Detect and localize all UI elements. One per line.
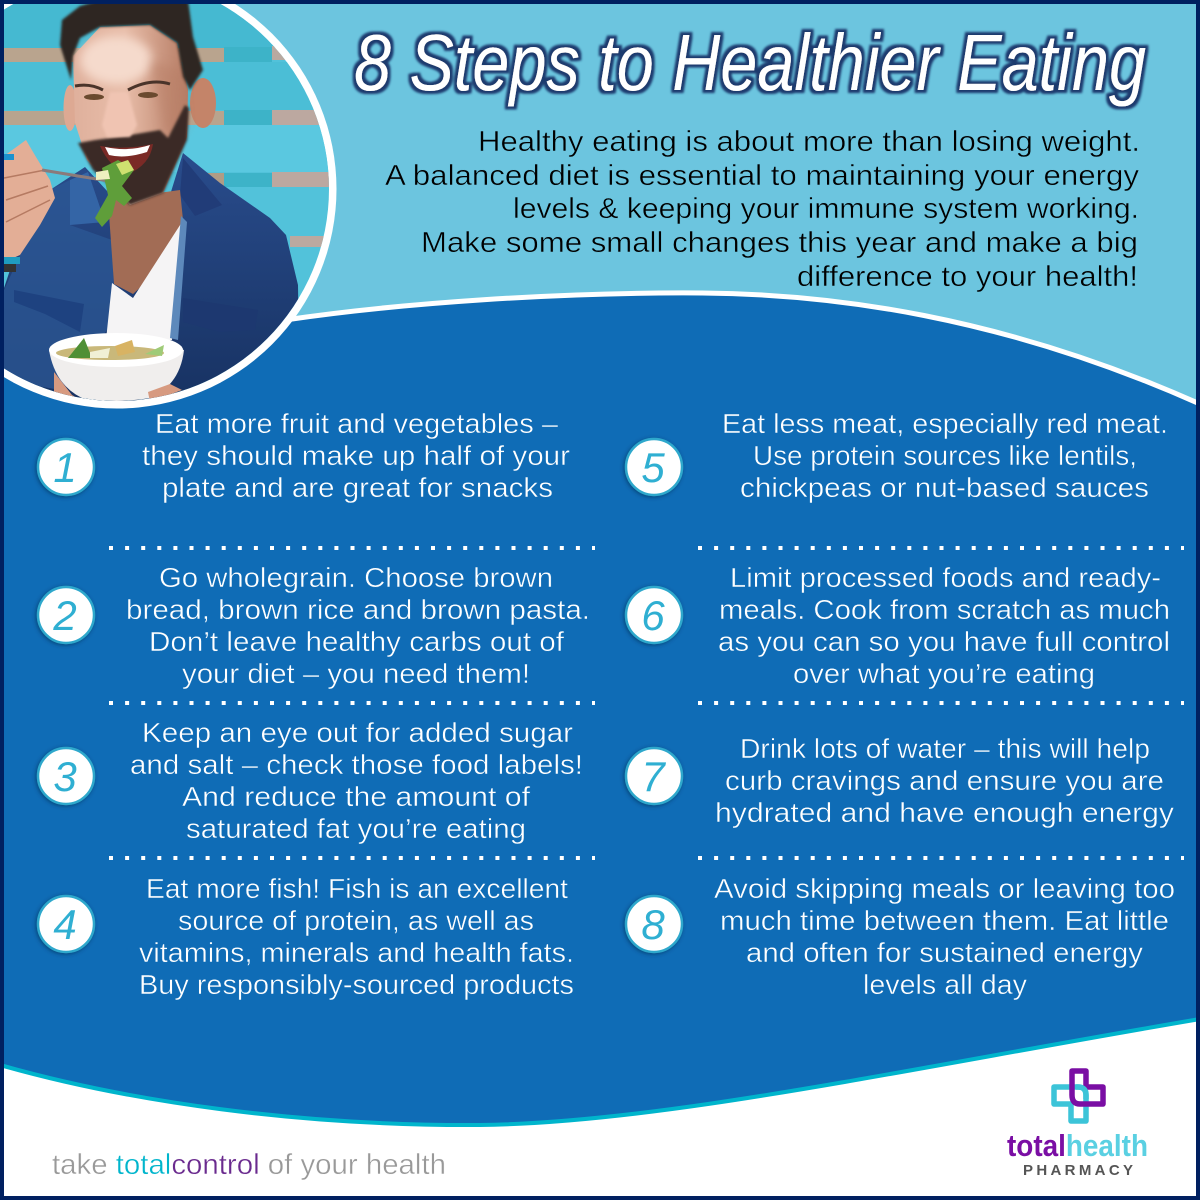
step 1 text: plate and are great for snacks bbox=[162, 472, 553, 503]
step 3 text: Keep an eye out for added sugar bbox=[142, 717, 573, 748]
face bbox=[73, 25, 188, 205]
step 8 bbox=[626, 873, 1175, 1000]
intro text bbox=[385, 126, 1140, 293]
step 8 text: Avoid skipping meals or leaving too bbox=[714, 873, 1175, 904]
salad on fork bbox=[95, 160, 134, 227]
step 5 text: Eat less meat, especially red meat. bbox=[722, 408, 1168, 439]
mouth bbox=[100, 144, 153, 174]
tagline: take totalcontrol of your health bbox=[52, 1149, 446, 1181]
logo subtitle: PHARMACY bbox=[1023, 1162, 1133, 1179]
right cheek shade bbox=[150, 60, 186, 135]
badge 7: 7 bbox=[641, 753, 666, 800]
badge 5 bbox=[626, 439, 682, 495]
intro text: A balanced diet is essential to maintaining your energy bbox=[385, 160, 1140, 192]
badge 4: 4 bbox=[53, 901, 77, 948]
step 7 bbox=[626, 733, 1174, 828]
photo: man eating salad in a circle bbox=[0, 0, 340, 420]
white shirt bbox=[106, 222, 182, 340]
step 4 text bbox=[139, 873, 574, 1000]
bowl bbox=[49, 350, 184, 401]
hair bbox=[60, 0, 203, 90]
jacket bbox=[0, 153, 300, 420]
bowl hands bbox=[54, 372, 76, 397]
step 4 text: Eat more fish! Fish is an excellent bbox=[146, 873, 568, 904]
badge 7 bbox=[626, 748, 682, 804]
ears bbox=[190, 78, 216, 128]
step 2 text: Don’t leave healthy carbs out of bbox=[149, 626, 564, 657]
panel: blue steps wave bbox=[0, 293, 1200, 1200]
step 8 text: and often for sustained energy bbox=[746, 937, 1143, 968]
step 8 text: levels all day bbox=[863, 969, 1027, 1000]
step 2 text: bread, brown rice and brown pasta. bbox=[126, 594, 590, 625]
logo wordmark: totalhealth bbox=[1007, 1128, 1148, 1163]
step 2 text: your diet – you need them! bbox=[182, 658, 530, 689]
step 3 text: saturated fat you’re eating bbox=[186, 813, 526, 844]
step 6 text: over what you’re eating bbox=[793, 658, 1095, 689]
badge 3 bbox=[38, 748, 94, 804]
icon: interlocked cross bbox=[1054, 1071, 1103, 1121]
badge 5: 5 bbox=[641, 444, 665, 491]
step 3 text: and salt – check those food labels! bbox=[130, 749, 583, 780]
badge 6 bbox=[626, 587, 682, 643]
nose bbox=[102, 92, 137, 137]
badge 1: 1 bbox=[53, 444, 77, 491]
dotted dividers bbox=[109, 548, 1184, 858]
badge 8 bbox=[626, 896, 682, 952]
step 2 text bbox=[126, 562, 590, 689]
intro text: Healthy eating is about more than losing weight. bbox=[478, 126, 1140, 158]
step 6 text: as you can so you have full control bbox=[718, 626, 1170, 657]
badge 4 bbox=[38, 896, 94, 952]
badge 2: 2 bbox=[52, 592, 77, 639]
step 7 text: Drink lots of water – this will help bbox=[740, 733, 1150, 764]
step 3 bbox=[38, 717, 583, 844]
badge 1 bbox=[38, 439, 94, 495]
step 4 text: Buy responsibly-sourced products bbox=[139, 969, 574, 1000]
logo: Total Health Pharmacy bbox=[1007, 1071, 1148, 1179]
step 8 text bbox=[714, 873, 1175, 1000]
step 5 text bbox=[722, 408, 1168, 503]
beard bbox=[78, 105, 189, 205]
step 6 text bbox=[718, 562, 1170, 689]
step 7 text: hydrated and have enough energy bbox=[715, 797, 1174, 828]
step 1 text: they should make up half of your bbox=[142, 440, 570, 471]
step 1 text bbox=[142, 408, 570, 503]
step 6 bbox=[626, 562, 1170, 689]
intro text: levels & keeping your immune system working. bbox=[513, 193, 1139, 225]
step 7 text bbox=[715, 733, 1174, 828]
step 2 text: Go wholegrain. Choose brown bbox=[159, 562, 553, 593]
step 7 text: curb cravings and ensure you are bbox=[725, 765, 1164, 796]
step 4 text: vitamins, minerals and health fats. bbox=[139, 937, 574, 968]
step 2 bbox=[38, 562, 590, 689]
badge 3: 3 bbox=[53, 753, 77, 800]
step 5 bbox=[626, 408, 1168, 503]
neck and chest bbox=[108, 190, 183, 294]
badge 8: 8 bbox=[641, 901, 665, 948]
step 1 text: Eat more fruit and vegetables – bbox=[155, 408, 558, 439]
step 5 text: chickpeas or nut-based sauces bbox=[740, 472, 1149, 503]
step 6 text: meals. Cook from scratch as much bbox=[719, 594, 1170, 625]
badge 2 bbox=[38, 587, 94, 643]
eyes and brows bbox=[75, 82, 170, 90]
step 5 text: Use protein sources like lentils, bbox=[753, 440, 1137, 471]
step 8 text: much time between them. Eat little bbox=[720, 905, 1169, 936]
step 3 text: And reduce the amount of bbox=[182, 781, 530, 812]
step 4 text: source of protein, as well as bbox=[178, 905, 534, 936]
step 6 text: Limit processed foods and ready- bbox=[730, 562, 1161, 593]
plank wall bbox=[0, 0, 340, 410]
forehead highlight bbox=[80, 36, 152, 84]
step 1 bbox=[38, 408, 570, 503]
badge 6: 6 bbox=[641, 592, 665, 639]
step 4 bbox=[38, 873, 574, 1000]
intro text: difference to your health! bbox=[797, 261, 1138, 293]
step 3 text bbox=[130, 717, 583, 844]
hand with fork bbox=[4, 140, 55, 262]
intro text: Make some small changes this year and make a big bbox=[421, 227, 1138, 259]
